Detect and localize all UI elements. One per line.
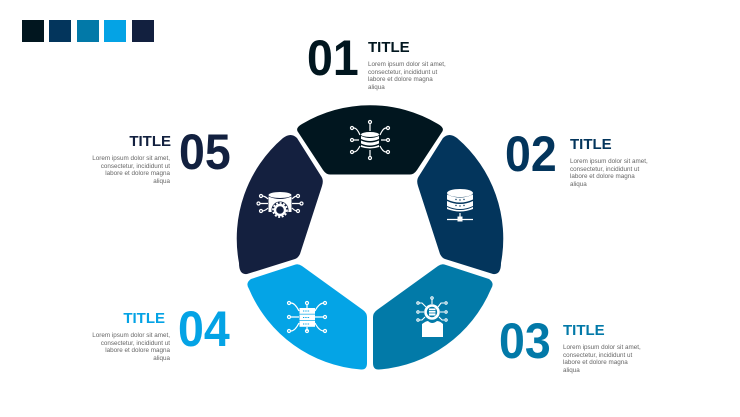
text block 05: aliqua (153, 178, 170, 185)
text block 02: Lorem ipsum dolor sit amet, (570, 158, 648, 165)
text block 02: consectetur, incididunt ut (570, 166, 639, 173)
text block 01: aliqua (368, 84, 385, 91)
text block 01: labore et dolore magna (368, 76, 433, 83)
text block 02: aliqua (570, 181, 587, 188)
number 03: 03 (498, 313, 550, 369)
segment 2 (417, 135, 503, 274)
text block 02 (570, 136, 648, 188)
text block 03: Lorem ipsum dolor sit amet, (563, 344, 641, 351)
segment 3 (373, 264, 493, 370)
text block 04: labore et dolore magna (105, 347, 170, 354)
text block 04: consectetur, incididunt ut (101, 340, 170, 347)
segment 5 (237, 135, 323, 274)
text block 05: Lorem ipsum dolor sit amet, (92, 155, 170, 162)
text block 04: TITLE (123, 310, 165, 327)
text block 03: aliqua (563, 367, 580, 374)
number 05: 05 (178, 124, 230, 180)
text block 03: consectetur, incididunt ut (563, 352, 632, 359)
text block 05: labore et dolore magna (105, 170, 170, 177)
text block 02: TITLE (570, 136, 612, 153)
text block 05: TITLE (129, 133, 171, 150)
text block 05: consectetur, incididunt ut (101, 163, 170, 170)
text block 03 (563, 322, 641, 374)
number 02: 02 (504, 126, 556, 182)
icon: database on network (447, 189, 473, 222)
text block 05 (92, 133, 171, 185)
segment 1 (297, 105, 443, 174)
icon: server with connectors (288, 302, 326, 332)
text block 03: TITLE (563, 322, 605, 339)
text block 01: TITLE (368, 39, 410, 56)
number 01: 01 (307, 30, 359, 86)
text block 04 (92, 310, 170, 362)
text block 02: labore et dolore magna (570, 173, 635, 180)
text block 04: aliqua (153, 355, 170, 362)
icon: database with connectors (350, 120, 390, 160)
text block 01: consectetur, incididunt ut (368, 69, 437, 76)
number 04: 04 (178, 301, 229, 357)
segment 4 (247, 264, 367, 370)
text block 03: labore et dolore magna (563, 359, 628, 366)
icon: person with gear (417, 297, 447, 337)
colour swatches (22, 20, 154, 42)
icon: database with gear (257, 192, 303, 218)
text block 01: Lorem ipsum dolor sit amet, (368, 61, 446, 68)
text block 01 (368, 39, 446, 91)
text block 04: Lorem ipsum dolor sit amet, (92, 332, 170, 339)
